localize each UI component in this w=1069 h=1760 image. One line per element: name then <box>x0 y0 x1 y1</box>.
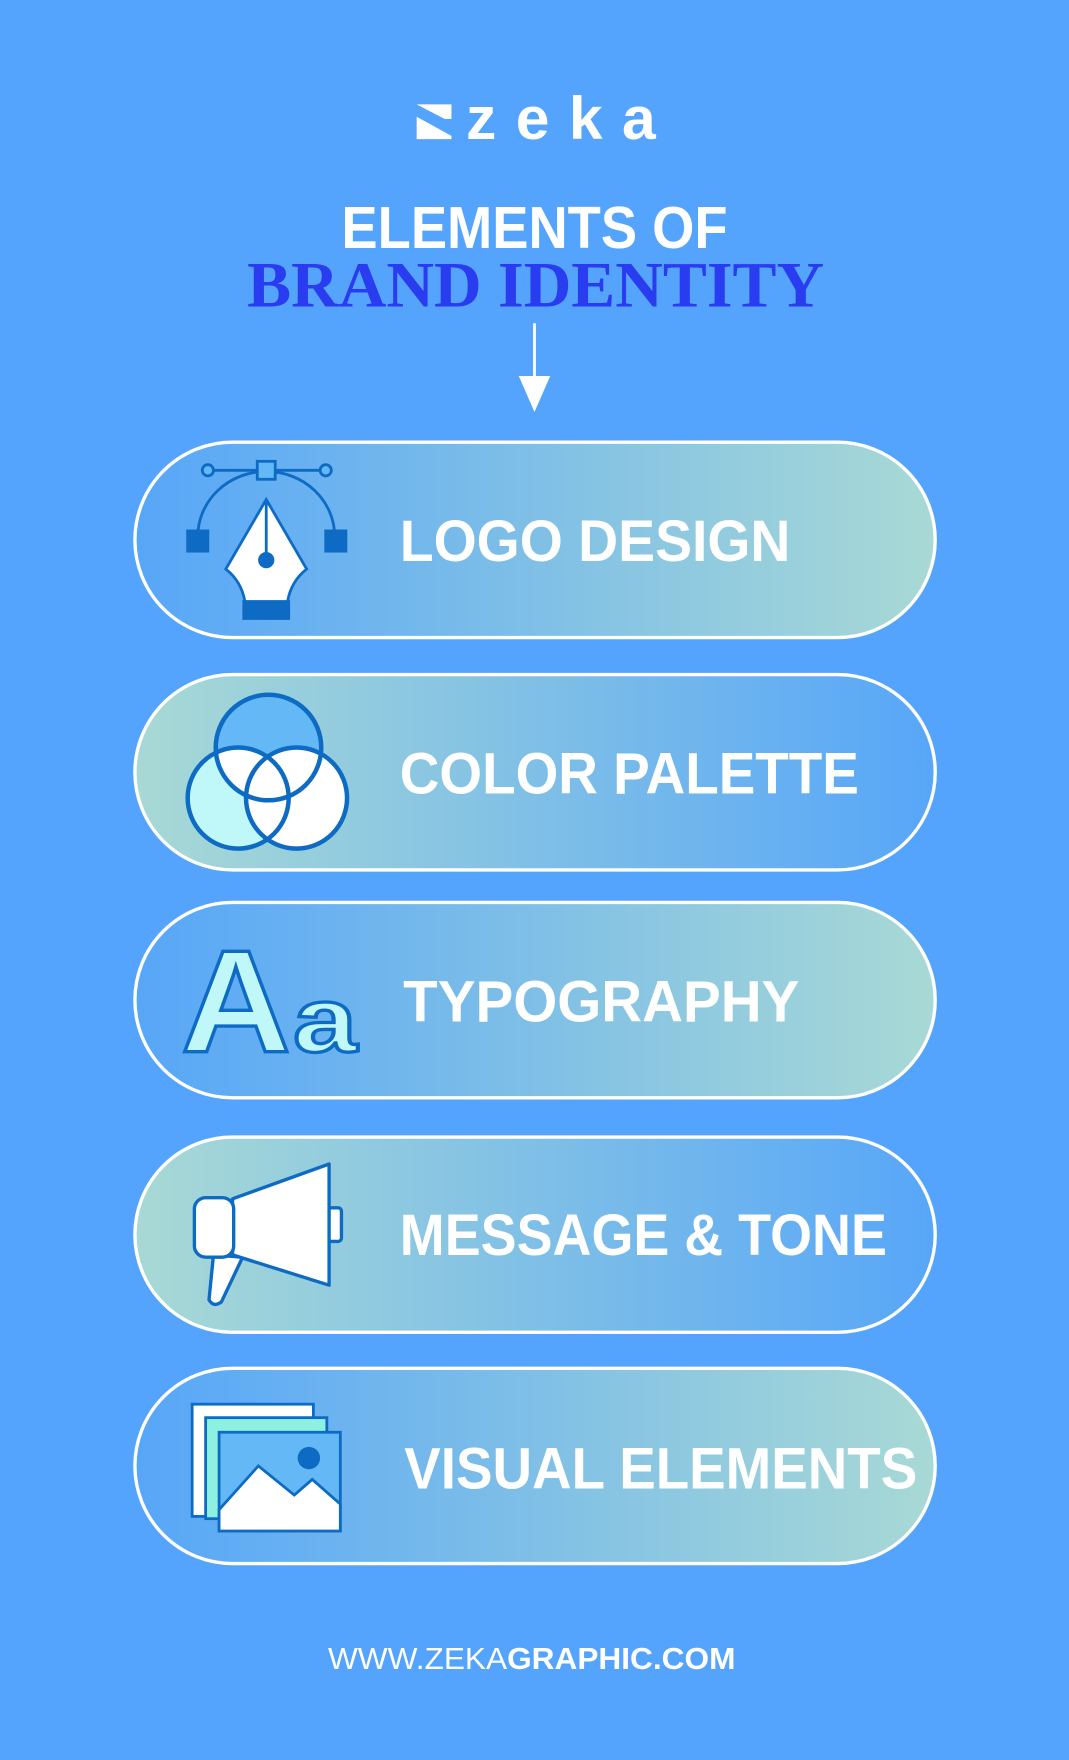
panel: visual elements <box>135 1368 935 1564</box>
logo: zeka: zeka <box>466 84 657 152</box>
title <box>247 194 824 321</box>
panel: logo design: LOGO DESIGN <box>400 509 790 574</box>
icon: Aa <box>181 920 358 1083</box>
icon: Aa: a <box>293 969 358 1072</box>
panel: typography <box>135 902 935 1098</box>
title: BRAND IDENTITY <box>247 249 824 321</box>
icon: pen tool <box>188 461 346 618</box>
panel: visual elements: VISUAL ELEMENTS <box>404 1436 917 1501</box>
panel: logo design <box>135 442 935 638</box>
icon: images <box>192 1404 340 1531</box>
panel: typography: TYPOGRAPHY <box>403 969 799 1034</box>
arrow <box>519 323 550 412</box>
panel: color palette <box>135 675 935 870</box>
panel: message & tone: MESSAGE & TONE <box>400 1203 887 1268</box>
icon: megaphone <box>194 1164 341 1304</box>
panel: color palette: COLOR PALETTE <box>400 742 859 807</box>
icon: Aa: A <box>181 920 291 1083</box>
panel: message & tone <box>135 1137 935 1332</box>
footer url: WWW.ZEKA GRAPHIC.COM <box>328 1643 735 1676</box>
title: ELEMENTS OF <box>341 194 728 261</box>
icon: color circles <box>188 695 347 849</box>
